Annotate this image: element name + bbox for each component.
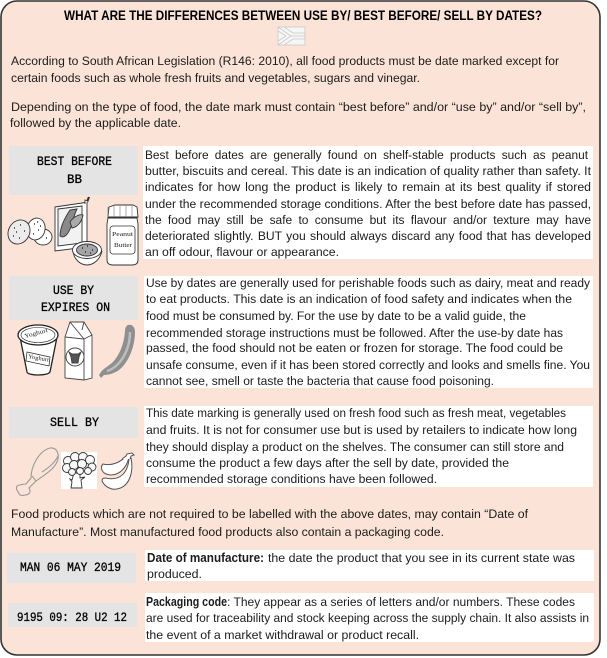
panel: use by label: EXPIRES ON [41, 300, 110, 315]
text block: packaging code: Packaging code [146, 595, 227, 609]
intro text paragraph 1 [11, 54, 559, 85]
panel: date of manufacture label [7, 553, 136, 583]
text block: use by [144, 276, 593, 388]
text block: date of manufacture intro: Food products which are not required to be labelled with the above dates, may contain “Date of [11, 507, 529, 521]
icon: bananas [101, 453, 134, 489]
text block: use by: cannot see, smell or taste the bacteria that cause food poisoning. [146, 374, 494, 388]
icon: cereal box [55, 197, 89, 251]
text block: best before: deteriorated slightly. BUT you should always discard any food that has developed [145, 229, 591, 243]
text block: best before: under the recommended storage conditions. After the best before date has passed, [145, 197, 591, 211]
text block: best before: the food may still be safe to consume but its flavour and/or texture may have [145, 213, 591, 227]
icon: cereal bowl [72, 242, 102, 265]
text block: sell by: and fruits. It is not for consumer use but is used by retailers to indicate how long [146, 423, 577, 437]
panel: date of manufacture label: MAN 06 MAY 2019 [20, 560, 121, 575]
intro text paragraph 1: According to South African Legislation (R146: 2010), all food products must be date marked except for [11, 54, 559, 68]
text block: packaging code: the event of a market withdrawal or product recall. [146, 628, 419, 642]
icon: sausage [99, 325, 135, 378]
text block: use by: unsafe consume, even if it has been stored correctly and looks and smells fine. You [146, 358, 590, 372]
panel: sell by label: SELL BY [50, 415, 99, 430]
panel: packaging code label: 9195 09: 28 U2 12 [17, 610, 127, 625]
text block: date of manufacture intro: Manufacture”. Most manufactured food products also contain a packaging code. [11, 525, 444, 539]
text block: packaging code: are used for traceability and stock keeping across the supply chain. It also assists in [146, 611, 589, 625]
icon: milk carton [65, 322, 92, 380]
text block: best before: an off odour, flavour or appearance. [145, 245, 339, 259]
text block: best before: Best before dates are generally found on shelf-stable products such as peanut [145, 148, 589, 162]
text block: date of manufacture: Date of manufacture: [147, 551, 264, 565]
icon: South African flag [278, 27, 305, 45]
icon: chicken drumstick [16, 448, 58, 495]
text block: date of manufacture intro [11, 507, 529, 539]
title: WHAT ARE THE DIFFERENCES BETWEEN USE BY/ BEST BEFORE/ SELL BY DATES? [64, 8, 542, 23]
icon: yoghurt cup: Yoghurt [27, 354, 50, 364]
text block: use by: food must be consumed by. For the use by date to be a valid guide, the [146, 309, 526, 323]
panel: use by label [9, 276, 138, 320]
intro text paragraph 2 [10, 100, 586, 130]
icon: yoghurt cup: Yoghurt [24, 328, 49, 340]
icon: peanut butter jar: Peanut [112, 231, 133, 238]
icon: peanut butter jar [107, 205, 138, 265]
text block: date of manufacture: produced. [147, 567, 202, 581]
text block: sell by [144, 406, 593, 487]
text block: sell by: This date marking is generally used on fresh food such as fresh meat, vegetables [146, 406, 566, 420]
text block: best before [143, 146, 593, 259]
text block: use by: passed, the food should not be eaten or frozen for storage. The food could be [146, 341, 563, 355]
panel: best before label: BEST BEFORE [37, 154, 112, 169]
icon: biscuits [4, 216, 52, 248]
text block: best before: indicates for how long the product is likely to remain at its best quality if stored [145, 180, 591, 194]
text block: sell by: recommended storage conditions have been followed. [146, 472, 437, 486]
panel: use by label: USE BY [53, 283, 94, 298]
intro text paragraph 2: followed by the applicable date. [10, 116, 181, 130]
text block: date of manufacture [145, 550, 594, 581]
text block: sell by: they should display a product on the shelves. The consumer can still store and [146, 440, 564, 454]
text block: use by: to eat products. This date is an indication of food safety and indicates when the [146, 292, 572, 306]
text block: use by: Use by dates are generally used for perishable foods such as dairy, meat and ready [146, 276, 591, 290]
panel: packaging code label [8, 603, 137, 627]
icon: broccoli [61, 452, 97, 489]
intro text paragraph 1: certain foods such as whole fresh fruits and vegetables, sugars and vinegar. [11, 71, 420, 85]
text block: date of manufacture: the date the product that you see in its current state was [268, 551, 575, 565]
icon: yoghurt cup [18, 325, 58, 375]
panel: sell by label [9, 407, 138, 438]
text block: use by: recommended storage instructions must be followed. After the use-by date has [146, 326, 563, 340]
intro text paragraph 2: Depending on the type of food, the date mark must contain “best before” and/or “use by” and/or “sell by”, [11, 100, 586, 114]
icon: peanut butter jar: Butter [114, 242, 133, 249]
text block: packaging code: : They appear as a series of letters and/or numbers. These codes [227, 595, 575, 609]
panel: best before label [9, 146, 138, 195]
text block: packaging code [145, 593, 594, 642]
text block: best before: butter, biscuits and cereal. This date is an indication of quality rather than safety. It [145, 164, 592, 178]
panel: best before label: BB [67, 172, 82, 187]
text block: sell by: consume the product a few days after the sell by date, provided the [146, 456, 509, 470]
